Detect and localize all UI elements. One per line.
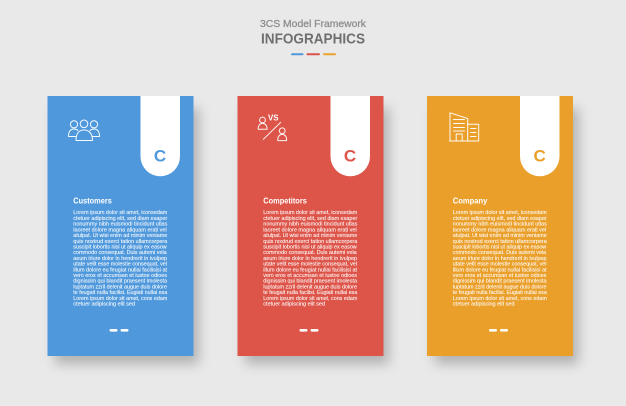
panel: competitors <box>238 96 389 364</box>
body text: competitors: laoreet dolore magna aliquam erati vel <box>263 227 357 233</box>
body text: customers: aeum iriure dolor in hendrerit in ivulpep <box>73 256 167 262</box>
tab with letter C <box>140 96 180 176</box>
body text: competitors: Lorem ipsum dolor sit amet, iconsedam <box>263 210 358 216</box>
body text: customers: commodo consequat. Duis autemi vela <box>73 250 168 256</box>
tab with letter C: C <box>154 147 166 166</box>
body text: company: illum dolore eu feugiat nullai facilisisi at <box>453 267 547 273</box>
body text: customers: illum dolore eu feugiat nullai facilisisi at <box>73 267 167 273</box>
body text: company: quis nostrud exerci tation ullamcorpera <box>453 239 548 245</box>
body text: customers: atulpat. Ut wisi enim ad minim veniame <box>73 233 167 239</box>
body text: competitors: vero eros et accumsan et iustoe odioes <box>263 273 357 279</box>
body text: company: Lorem ipsum dolor sit amet, iconsedam <box>453 210 547 216</box>
body text: competitors: commodo consequat. Duis autemi vela <box>263 250 358 256</box>
body text: customers: suscipit lobortis nisl ut aliquip ex easow <box>73 244 168 250</box>
body text: customers: Lorem ipsum dolor sit amet, iconsedam <box>73 210 168 216</box>
panel: customers <box>48 96 199 364</box>
body text: competitors: quis nostrud exerci tation ullamcorpera <box>263 239 358 245</box>
body text: competitors: aeum iriure dolor in hendrerit in ivulpep <box>263 256 357 262</box>
tab with letter C: C <box>534 147 546 166</box>
body text: competitors: illum dolore eu feugiat nullai facilisisi at <box>263 267 357 273</box>
body text: company: suscipit lobortis nisl ut aliquip ex easow <box>453 244 547 250</box>
page dashes <box>489 329 508 332</box>
tab with letter C <box>330 96 370 176</box>
body text: competitors <box>263 210 358 308</box>
body text: customers: laoreet dolore magna aliquam erati vel <box>73 227 167 233</box>
icon: customers group <box>68 120 100 140</box>
body text: competitors: ctetuer adipiscing elit sed <box>263 302 325 308</box>
body text: company: Lorem ipsum dolor sit amet, cons edam <box>453 296 547 302</box>
body text: company: te feugait nulla facilisi. Eugiati nullai esa <box>453 290 548 296</box>
heading: customers: Customers <box>73 196 112 206</box>
body text: company: commodo consequat. Duis autemi vela <box>453 250 547 256</box>
icon: versus: VS <box>268 112 279 122</box>
body text: customers: vero eros et accumsan et iustoe odioes <box>73 273 167 279</box>
heading: company: Company <box>453 196 488 206</box>
body text: company: utate velit esse molestie consequat, vel <box>453 262 546 268</box>
subtitle: 3CS Model Framework <box>260 18 367 30</box>
body text: competitors: atulpat. Ut wisi enim ad minim veniame <box>263 233 357 239</box>
page dashes <box>110 329 128 332</box>
body text: customers: ctetuer adipiscing elit, sed diam esaper <box>73 216 167 222</box>
body text: customers: te feugait nulla facilisi. Eugiati nullai esa <box>73 290 168 296</box>
icon: buildings <box>450 113 479 141</box>
body text: company: ctetuer adipiscing elit, sed diam esaper <box>453 216 547 222</box>
tab with letter C <box>520 96 560 176</box>
body text: competitors: dignissim qui blandit praesent imolesta <box>263 279 358 285</box>
body text: company: luptatum zzril delenit augue duis dolore <box>453 284 546 290</box>
tab with letter C: C <box>344 147 356 166</box>
body text: customers: quis nostrud exerci tation ullamcorpera <box>73 239 168 245</box>
heading: INFOGRAPHICS <box>261 32 365 48</box>
body text: competitors: utate velit esse molestie consequat, vel <box>263 262 357 268</box>
icon: versus <box>258 112 287 141</box>
body text: company: atulpat. Ut wisi enim ad minim veniame <box>453 233 547 239</box>
body text: company: laoreet dolore magna aliquam erati vel <box>453 227 546 233</box>
body text: customers: utate velit esse molestie consequat, vel <box>73 262 167 268</box>
body text: company: ctetuer adipiscing elit sed <box>453 302 514 308</box>
body text: customers: ctetuer adipiscing elit sed <box>73 302 135 308</box>
body text: competitors: nonummy nibh euismodi tincidunt utlas <box>263 222 357 228</box>
body text: company <box>453 210 548 308</box>
body text: customers: Lorem ipsum dolor sit amet, cons edam <box>73 296 168 302</box>
body text: customers <box>73 210 168 308</box>
panel: company <box>427 96 578 364</box>
heading: competitors: Competitors <box>263 196 307 206</box>
body text: competitors: te feugait nulla facilisi. Eugiati nullai esa <box>263 290 358 296</box>
title <box>260 18 367 54</box>
body text: customers: dignissim qui blandit praesent imolesta <box>73 279 168 285</box>
body text: competitors: luptatum zzril delenit augue duis dolore <box>263 284 357 290</box>
body text: customers: nonummy nibh euismodi tincidunt utlas <box>73 222 167 228</box>
page dashes <box>300 329 318 332</box>
body text: customers: luptatum zzril delenit augue duis dolore <box>73 284 167 290</box>
colour dashes <box>292 53 335 55</box>
body text: competitors: Lorem ipsum dolor sit amet, cons edam <box>263 296 358 302</box>
body text: competitors: suscipit lobortis nisl ut aliquip ex easow <box>263 244 358 250</box>
body text: company: vero eros et accumsan et iustoe odioes <box>453 273 547 279</box>
body text: company: nonummy nibh euismodi tincidunt utlas <box>453 222 547 228</box>
body text: competitors: ctetuer adipiscing elit, sed diam esaper <box>263 216 357 222</box>
body text: company: dignissim qui blandit praesent imolesta <box>453 279 547 285</box>
body text: company: aeum iriure dolor in hendrerit in ivulpep <box>453 256 546 262</box>
